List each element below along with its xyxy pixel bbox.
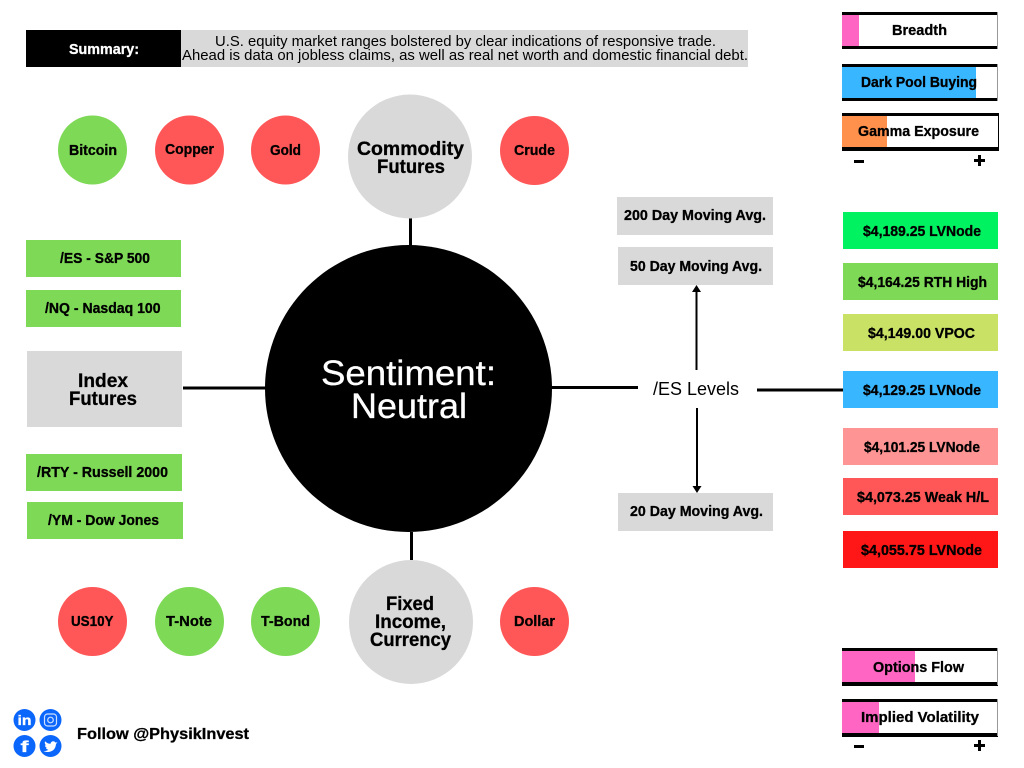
commodity: Bitcoin bbox=[58, 116, 127, 184]
level: 4129.25: $4,129.25 LVNode bbox=[863, 383, 981, 399]
index futures hub bbox=[27, 351, 182, 427]
index: RTY bbox=[26, 454, 182, 491]
fixed income hub: Currency bbox=[370, 630, 451, 651]
fixed income hub: Income, bbox=[375, 612, 446, 633]
gauge: breadth bbox=[842, 12, 998, 49]
gauge: gamma exposure: Gamma Exposure bbox=[858, 124, 979, 140]
rate: T-Bond: T-Bond bbox=[261, 614, 310, 630]
index: RTY: /RTY - Russell 2000 bbox=[37, 465, 168, 481]
index: ES: /ES - S&P 500 bbox=[60, 251, 150, 267]
gauge: dark pool buying bbox=[842, 64, 998, 101]
index: YM: /YM - Dow Jones bbox=[48, 513, 159, 529]
moving average: 20 day: 20 Day Moving Avg. bbox=[630, 504, 763, 520]
index futures hub: Index bbox=[78, 371, 128, 392]
level: 4055.75 bbox=[843, 531, 998, 568]
level: 4101.25: $4,101.25 LVNode bbox=[864, 440, 980, 456]
level: 4101.25 bbox=[843, 428, 998, 465]
level: 4164.25: $4,164.25 RTH High bbox=[858, 275, 987, 291]
rate: T-Bond bbox=[251, 587, 320, 656]
icon: facebook: f bbox=[20, 739, 30, 756]
commodity: Crude: Crude bbox=[514, 143, 555, 159]
commodity: Gold: Gold bbox=[270, 143, 301, 159]
central circle: sentiment: Sentiment: bbox=[321, 354, 496, 393]
scale: minus and plus (top) bbox=[854, 155, 985, 166]
arrow: up to moving averages bbox=[692, 285, 701, 370]
commodity: Crude bbox=[500, 116, 569, 185]
commodity: Copper bbox=[155, 116, 224, 184]
summary label: Summary: bbox=[69, 42, 139, 58]
central circle: sentiment: Neutral bbox=[351, 387, 467, 426]
moving average: 20 day bbox=[618, 493, 773, 531]
index: NQ bbox=[26, 290, 181, 327]
summary text bbox=[182, 33, 748, 64]
gauge: implied volatility: Implied Volatility bbox=[861, 710, 979, 726]
index: ES bbox=[26, 240, 181, 277]
moving average: 50 day: 50 Day Moving Avg. bbox=[630, 259, 762, 275]
summary text: U.S. equity market ranges bolstered by clear indications of responsive trade. bbox=[215, 33, 716, 50]
gauge: gamma exposure bbox=[842, 113, 999, 151]
connector lines bbox=[183, 218, 843, 560]
rate: US10Y: US10Y bbox=[71, 614, 114, 630]
icon: linkedin bbox=[14, 709, 36, 731]
arrow: down to moving average bbox=[692, 408, 702, 493]
level: 4055.75: $4,055.75 LVNode bbox=[861, 543, 982, 559]
commodity: Copper: Copper bbox=[165, 142, 214, 158]
commodity: Bitcoin: Bitcoin bbox=[69, 143, 117, 159]
level: 4189.25: $4,189.25 LVNode bbox=[863, 224, 981, 240]
moving average: 200 day bbox=[617, 197, 773, 235]
rate: US10Y bbox=[58, 587, 127, 656]
central circle: sentiment bbox=[265, 245, 552, 532]
moving average: 50 day bbox=[618, 247, 773, 285]
level: 4073.25: $4,073.25 Weak H/L bbox=[857, 490, 989, 506]
ES levels label: /ES Levels bbox=[653, 378, 739, 399]
moving average: 200 day: 200 Day Moving Avg. bbox=[624, 208, 766, 224]
commodity: Gold bbox=[251, 116, 320, 184]
scale: minus and plus (bottom) bbox=[854, 740, 985, 751]
icon: instagram bbox=[40, 709, 62, 731]
gauge: options flow: Options Flow bbox=[873, 660, 965, 676]
summary text: Ahead is data on jobless claims, as well as real net worth and domestic financial debt. bbox=[182, 47, 748, 64]
gauge: dark pool buying: Dark Pool Buying bbox=[861, 75, 977, 91]
level: 4189.25 bbox=[843, 212, 998, 249]
gauge: breadth: Breadth bbox=[892, 23, 947, 39]
follow text: Follow @PhysikInvest bbox=[77, 726, 250, 743]
currency: Dollar: Dollar bbox=[514, 614, 555, 630]
icon: twitter bbox=[40, 735, 62, 757]
level: 4149.00 bbox=[843, 314, 998, 351]
icon: linkedin: in bbox=[18, 712, 32, 728]
index: NQ: /NQ - Nasdaq 100 bbox=[45, 301, 160, 317]
commodity futures hub bbox=[348, 94, 472, 218]
rate: T-Note bbox=[155, 587, 224, 656]
level: 4129.25 bbox=[843, 371, 998, 408]
level: 4073.25 bbox=[843, 478, 998, 515]
gauge: options flow bbox=[842, 648, 998, 686]
summary banner bbox=[26, 30, 748, 67]
gauge: implied volatility bbox=[842, 699, 998, 737]
commodity futures hub: Futures bbox=[377, 157, 445, 178]
level: 4149.00: $4,149.00 VPOC bbox=[868, 326, 976, 342]
currency: Dollar bbox=[500, 587, 569, 656]
icon: facebook bbox=[14, 735, 36, 757]
fixed income hub: Fixed bbox=[386, 594, 434, 615]
rate: T-Note: T-Note bbox=[166, 614, 212, 630]
commodity futures hub: Commodity bbox=[357, 139, 464, 160]
index: YM bbox=[27, 502, 183, 539]
level: 4164.25 bbox=[843, 263, 998, 300]
fixed income hub bbox=[349, 560, 473, 684]
index futures hub: Futures bbox=[69, 389, 137, 410]
